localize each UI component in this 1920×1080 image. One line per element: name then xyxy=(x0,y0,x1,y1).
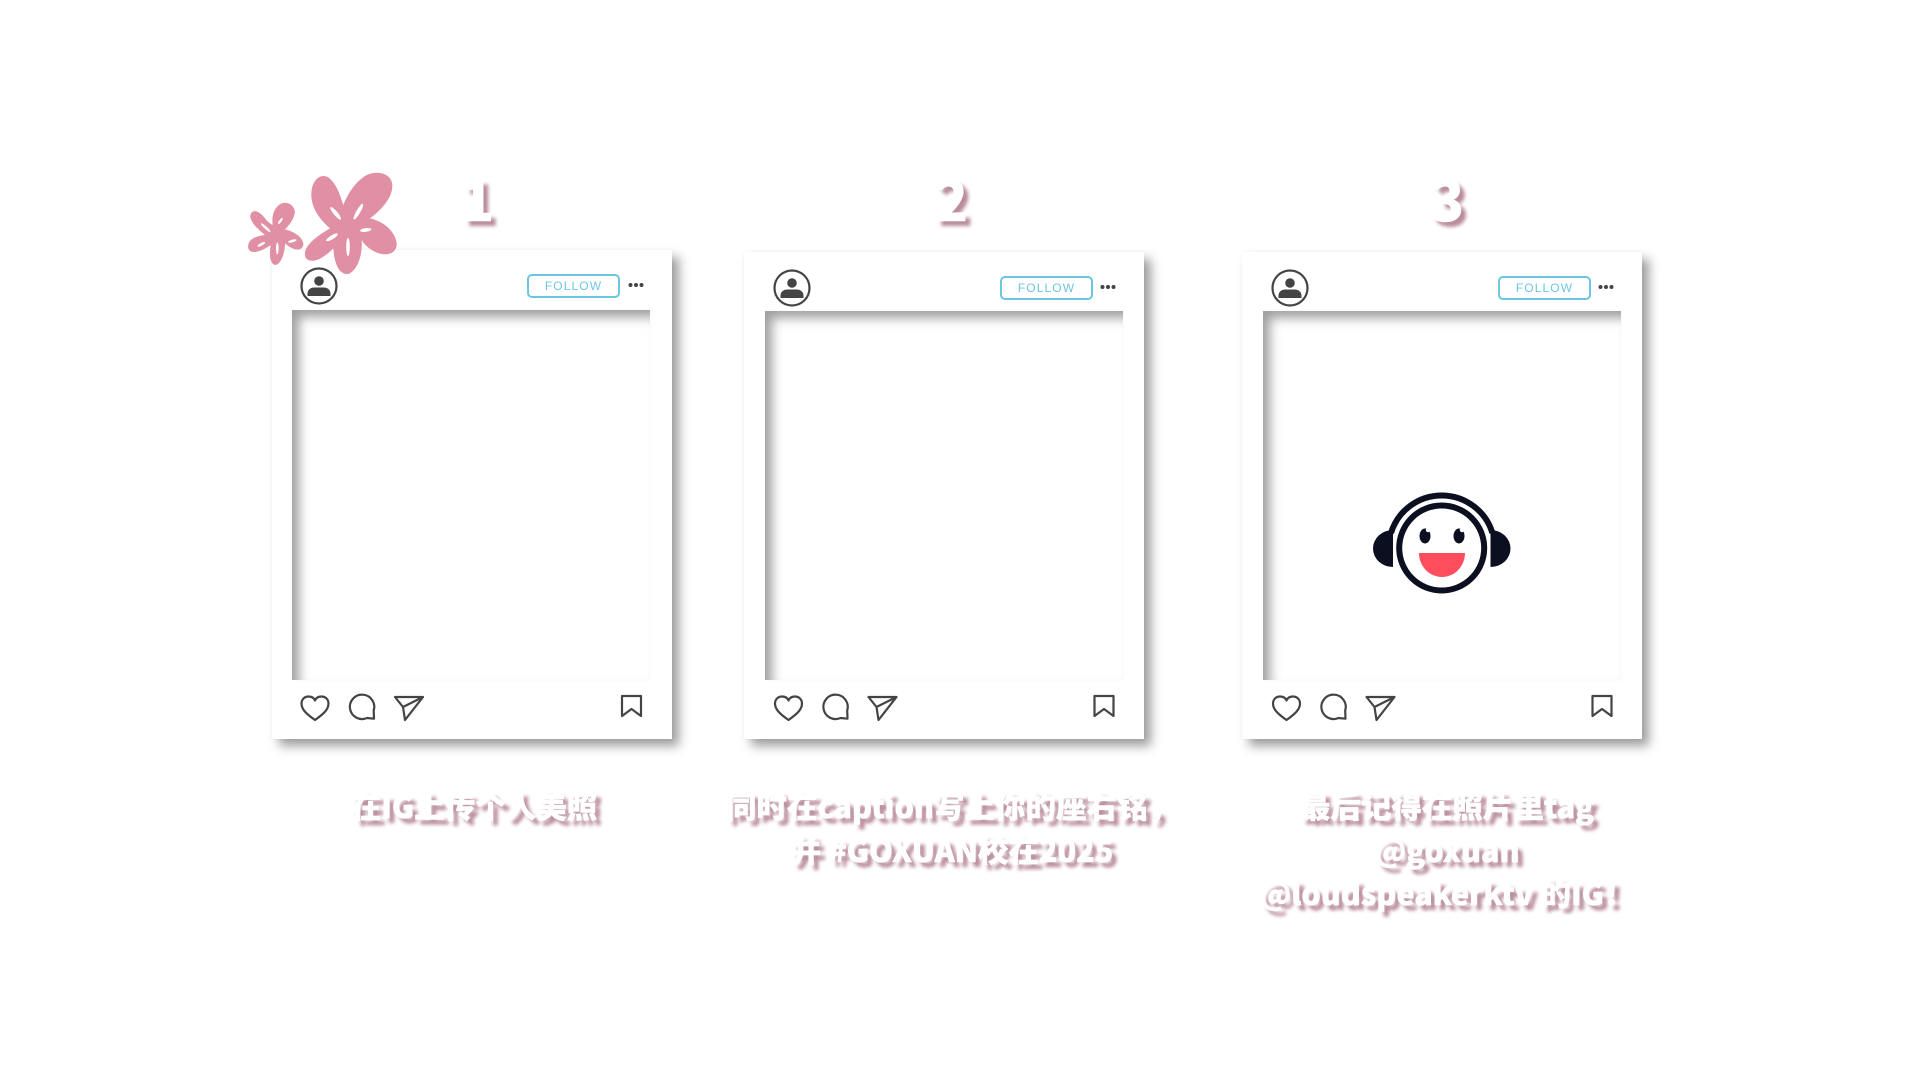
panel: post frame 3 xyxy=(1242,252,1642,739)
number 2: 2 xyxy=(934,157,968,238)
follow button: FOLLOW xyxy=(1516,281,1573,295)
more dots xyxy=(628,283,644,287)
action icons xyxy=(1272,694,1613,722)
number 3: 3 xyxy=(1430,157,1464,238)
action icons xyxy=(300,694,642,722)
more dots xyxy=(1100,285,1116,289)
panel: post frame 1 xyxy=(272,250,672,739)
action icons xyxy=(774,694,1115,722)
caption 3: @goxuan xyxy=(1374,826,1520,870)
caption 2: 同时在caption写上你的座右铭， xyxy=(726,783,1178,827)
follow button xyxy=(1000,276,1093,300)
avatar icon xyxy=(1271,269,1309,307)
avatar icon xyxy=(773,269,811,307)
icon: headphone smiley logo xyxy=(1373,492,1510,594)
more dots xyxy=(1598,285,1614,289)
follow button: FOLLOW xyxy=(545,279,602,293)
caption 1: 在IG上传个人美照 xyxy=(351,783,597,827)
caption 2 xyxy=(726,783,1178,872)
follow button xyxy=(1498,276,1591,300)
icon: pink flowers xyxy=(248,172,397,274)
caption 3: @loudspeakerktv 的IG！ xyxy=(1260,870,1634,914)
follow button xyxy=(527,274,620,298)
caption 3: 最后记得在照片里tag xyxy=(1300,783,1594,827)
photo area xyxy=(765,311,1123,680)
panel: post frame 2 xyxy=(744,252,1144,739)
photo area xyxy=(292,310,650,680)
caption 3 xyxy=(1260,783,1634,919)
photo area xyxy=(1263,311,1621,680)
avatar icon xyxy=(300,267,338,305)
follow button: FOLLOW xyxy=(1018,281,1075,295)
caption 2: 并 #GOXUAN校在2025 xyxy=(791,826,1113,870)
number 1: 1 xyxy=(460,157,494,238)
